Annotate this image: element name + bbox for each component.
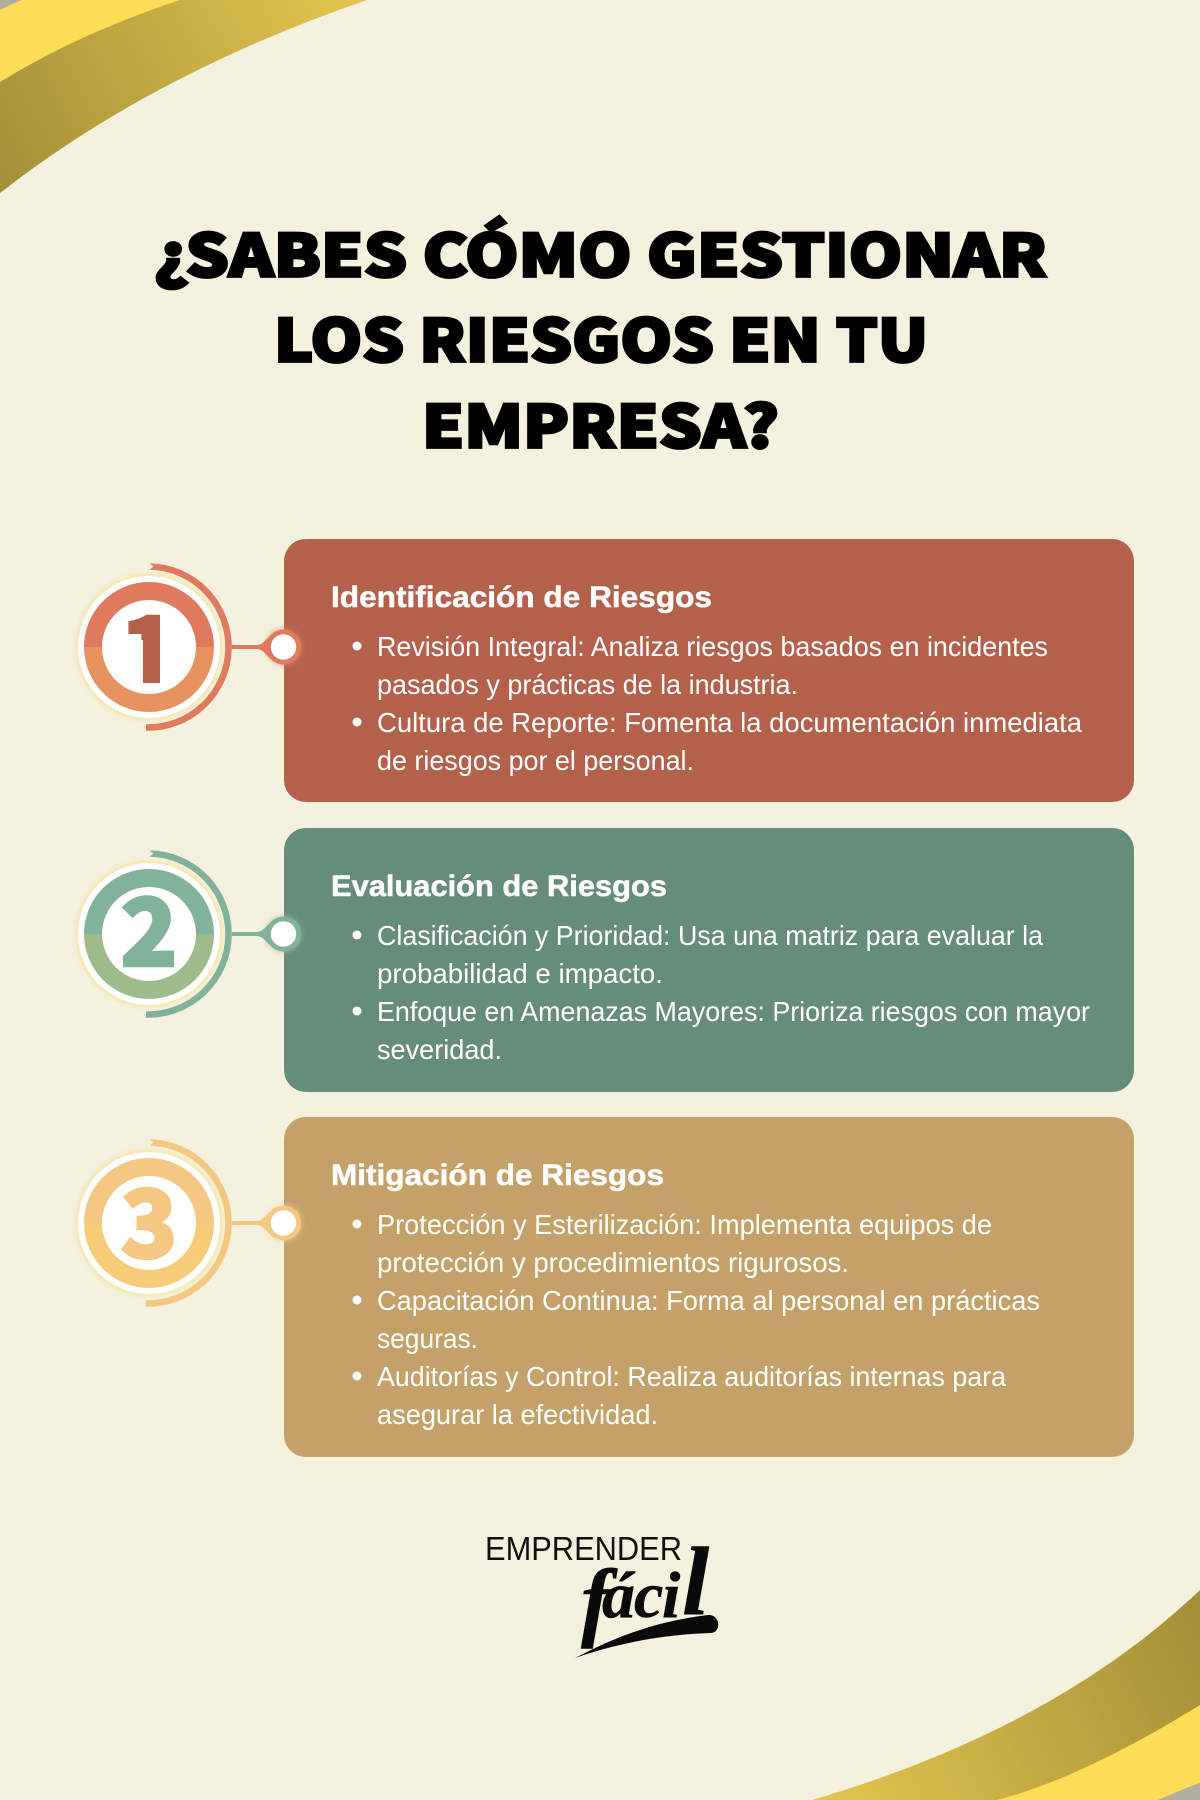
- bullet list: evaluación: severidad.: [377, 1034, 502, 1065]
- bullet list: evaluación: probabilidad e impacto.: [377, 958, 663, 989]
- bullet list: evaluación: [352, 920, 1090, 1065]
- decorative curve: top left: [0, 0, 367, 193]
- bullet list: mitigación: [352, 1209, 1040, 1430]
- number 2: 2: [120, 858, 178, 994]
- logo: emprender fácil: l: [682, 1528, 710, 1636]
- bullet list: evaluación: Clasificación y Prioridad: Usa una matriz para evaluar la: [377, 920, 1044, 951]
- bullet list: identificación: Cultura de Reporte: Fomenta la documentación inmediata: [377, 707, 1083, 738]
- bullet list: evaluación: Enfoque en Amenazas Mayores: Prioriza riesgos con mayor: [377, 996, 1090, 1027]
- panel: mitigación de riesgos: [284, 1117, 1134, 1457]
- logo: emprender fácil: EMPRENDER: [485, 1530, 682, 1567]
- connector 3: [232, 1204, 302, 1242]
- decorative curve: bottom right: [812, 1590, 1200, 1800]
- bullet list: mitigación: Auditorías y Control: Realiza auditorías internas para: [377, 1361, 1007, 1392]
- logo: emprender fácil: c: [634, 1559, 663, 1632]
- bullet list: identificación: Revisión Integral: Analiza riesgos basados en incidentes: [377, 631, 1048, 662]
- title: LOS RIESGOS EN TU: [274, 294, 928, 378]
- step badge 1: [76, 563, 302, 728]
- title: ¿SABES CÓMO GESTIONAR: [154, 208, 1047, 294]
- title: [154, 208, 1047, 464]
- number 3: 3: [120, 1150, 178, 1286]
- step badge 2: [76, 850, 302, 1015]
- bullet list: mitigación: Protección y Esterilización: Implementa equipos de: [377, 1209, 992, 1240]
- bullet list: identificación: de riesgos por el personal.: [377, 745, 694, 776]
- panel: identificación de riesgos: [284, 539, 1134, 802]
- step badge 3: [76, 1139, 302, 1304]
- logo: emprender fácil: i: [662, 1559, 681, 1632]
- bullet list: mitigación: protección y procedimientos rigurosos.: [377, 1247, 849, 1278]
- connector 1: [232, 628, 302, 666]
- heading: mitigación: Mitigación de Riesgos: [331, 1159, 664, 1192]
- heading: evaluación: Evaluación de Riesgos: [331, 870, 667, 903]
- bullet list: mitigación: Capacitación Continua: Forma al personal en prácticas: [377, 1285, 1040, 1316]
- connector 2: [232, 916, 302, 952]
- panel: evaluación de riesgos: [284, 828, 1134, 1092]
- bullet list: mitigación: seguras.: [377, 1323, 478, 1354]
- logo: emprender fácil: f: [581, 1553, 618, 1650]
- heading: identificación: Identificación de Riesgos: [331, 581, 712, 614]
- bullet list: identificación: [352, 631, 1083, 776]
- title: EMPRESA?: [422, 380, 779, 464]
- logo: emprender fácil: [485, 1528, 718, 1658]
- number 1: 1: [120, 576, 178, 712]
- bullet list: identificación: pasados y prácticas de la industria.: [377, 669, 798, 700]
- logo: emprender fácil: á: [602, 1559, 636, 1632]
- bullet list: mitigación: asegurar la efectividad.: [377, 1399, 658, 1430]
